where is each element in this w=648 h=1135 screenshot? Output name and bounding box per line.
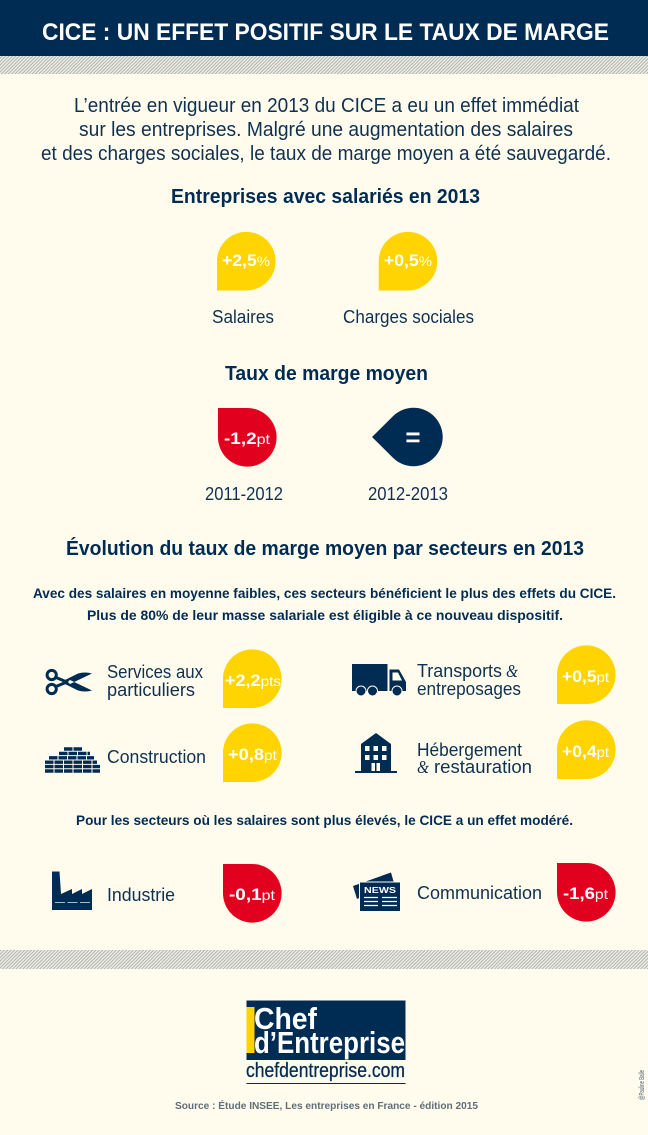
- stat: 2011-2012: 2011-2012: [205, 484, 283, 504]
- logo: Chef d'Entreprise: Chef: [254, 1001, 318, 1036]
- sector: hébergement et restauration: restauration: [434, 757, 532, 777]
- title banner: CICE : UN EFFET POSITIF SUR LE TAUX DE MARGE: [42, 19, 609, 46]
- sector: hébergement et restauration: Hébergement: [417, 740, 522, 760]
- intro text: [41, 95, 611, 165]
- stat: salaires: Salaires: [212, 307, 274, 327]
- sector: construction: Construction: [107, 747, 206, 767]
- sector: hébergement et restauration: &: [417, 757, 429, 777]
- icon: newspaper: [353, 872, 400, 912]
- sector: industrie: Industrie: [107, 885, 175, 905]
- sector: transports et entreposages: [352, 645, 616, 704]
- stat: 2012-2013: =: [405, 422, 421, 452]
- title banner: [0, 0, 648, 56]
- sector: communication: Communication: [417, 883, 542, 903]
- logo: Chef d'Entreprise: chefdentreprise.com: [246, 1060, 405, 1082]
- icon: scissors: [47, 670, 92, 694]
- sector: hébergement et restauration: [355, 720, 616, 779]
- sector: construction: [45, 723, 282, 782]
- sector: construction: +0,8pt: [228, 746, 277, 764]
- stat: charges sociales: Charges sociales: [343, 307, 474, 327]
- stat: 2012-2013: 2012-2013: [368, 484, 448, 504]
- sector: industrie: [52, 864, 282, 923]
- explanatory text: Avec des salaires en moyenne faibles, ces secteurs bénéficient le plus des effets du CICE.: [33, 585, 616, 601]
- logo: Chef d'Entreprise: [246, 1000, 406, 1084]
- heading: entreprises avec salariés: Entreprises avec salariés en 2013: [171, 186, 480, 208]
- stat: charges sociales: +0,5%: [384, 252, 432, 270]
- sector: transports et entreposages: +0,5pt: [562, 668, 609, 686]
- sector: services aux particuliers: particuliers: [107, 680, 195, 700]
- stat: salaires: +2,5%: [222, 252, 270, 270]
- intro text: et des charges sociales, le taux de marge moyen a été sauvegardé.: [41, 143, 611, 165]
- moderate effect text: Pour les secteurs où les salaires sont plus élevés, le CICE a un effet modéré.: [76, 812, 573, 828]
- stat: charges sociales: [343, 232, 474, 327]
- heading: taux de marge moyen: Taux de marge moyen: [225, 363, 428, 385]
- sector: transports et entreposages: entreposages: [417, 679, 521, 699]
- stat: salaires: [212, 232, 276, 327]
- stat: 2011-2012: -1,2 pt: [224, 430, 270, 448]
- explanatory text: [33, 585, 616, 623]
- icon: truck: [352, 664, 406, 696]
- sector: hébergement et restauration: +0,4pt: [562, 743, 609, 761]
- sector: communication: -1,6pt: [563, 885, 608, 903]
- icon: newspaper: NEWS: [364, 886, 397, 895]
- heading: évolution par secteurs: Évolution du taux de marge moyen par secteurs en 2013: [66, 537, 584, 560]
- explanatory text: Plus de 80% de leur masse salariale est éligible à ce nouveau dispositif.: [87, 607, 563, 623]
- sector: transports et entreposages: &: [506, 661, 518, 681]
- sector: communication: [353, 863, 616, 922]
- source: Source : Étude INSEE, Les entreprises en France - édition 2015: [175, 1099, 478, 1112]
- icon: bricks: [45, 749, 100, 771]
- logo: Chef d'Entreprise: d’Entreprise: [254, 1025, 405, 1060]
- sector: industrie: -0,1 pt: [229, 886, 275, 904]
- intro text: sur les entreprises. Malgré une augmentation des salaires: [79, 119, 573, 141]
- credit: @Pauline Balle: [639, 1070, 646, 1100]
- icon: building: [355, 733, 397, 773]
- sector: transports et entreposages: Transports: [417, 661, 502, 681]
- stat: 2012-2013: [368, 408, 448, 504]
- stat: 2011-2012: [205, 408, 283, 504]
- sector: services aux particuliers: +2,2pts: [225, 672, 281, 690]
- sector: services aux particuliers: Services aux: [107, 662, 203, 682]
- sector: services aux particuliers: [47, 649, 282, 708]
- intro text: L’entrée en vigueur en 2013 du CICE a eu un effet immédiat: [74, 95, 579, 117]
- icon: factory: [52, 872, 92, 910]
